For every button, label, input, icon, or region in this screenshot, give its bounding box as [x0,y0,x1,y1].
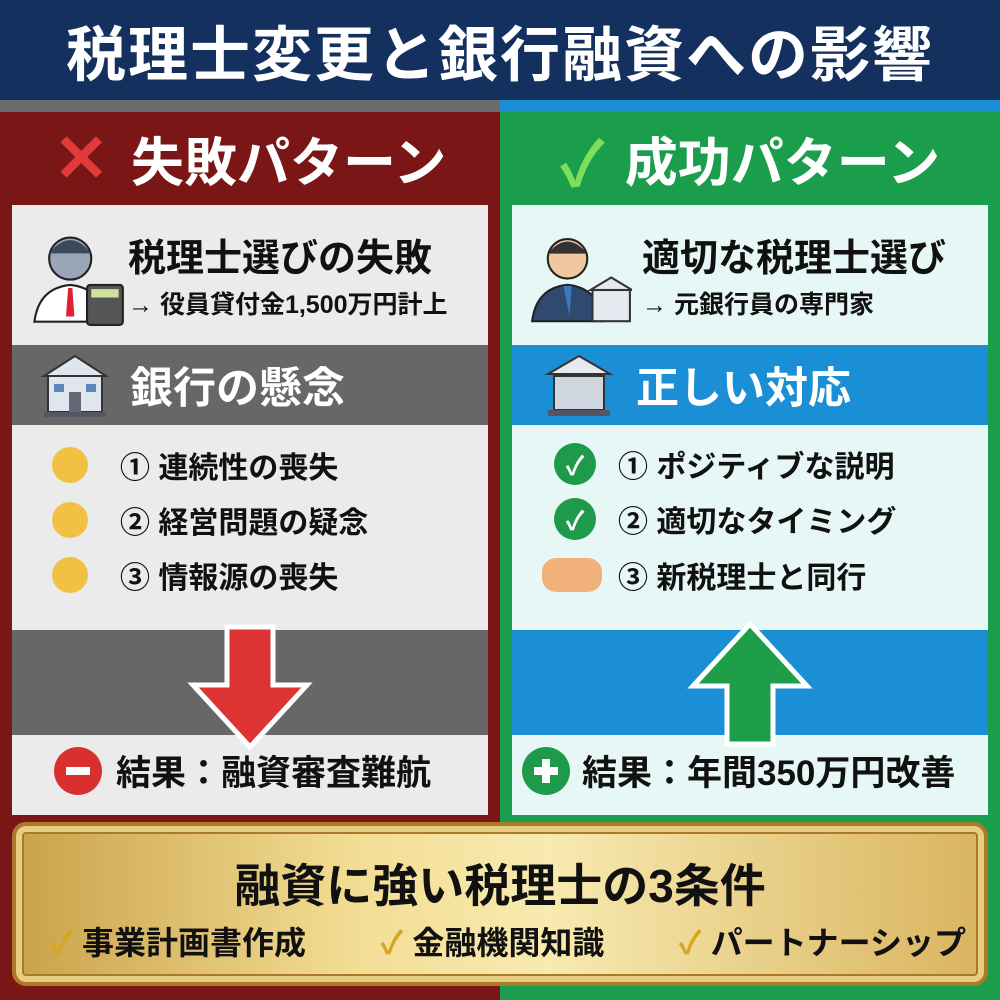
list: conditions: ✓ パートナーシップ [679,925,966,961]
heading: conditions: 融資に強い税理士の3条件 [234,860,766,912]
result: failure [54,747,431,795]
band: bank concern [12,345,488,425]
item 1 [52,447,338,485]
title bar [0,0,1000,100]
arrow: up [687,620,813,746]
text: failure subtitle: 税理士選びの失敗 [128,238,432,280]
item 2 [554,498,896,540]
title bar: 税理士変更と銀行融資への影響 [66,22,934,88]
panel: success pattern [500,112,1000,1000]
list: conditions: ✓ 金融機関知識 [380,925,604,961]
heading: failure: 失敗パターン [131,134,446,192]
list: concerns [52,447,368,595]
list: conditions: ✓ 事業計画書作成 [50,925,306,961]
list: conditions [50,925,966,961]
band: correct response: 正しい対応 [636,365,851,413]
item 2: ② 適切なタイミング [618,506,896,539]
text: failure detail: → 役員貸付金1,500万円計上 [128,291,448,319]
list: responses [542,443,896,595]
icon: bank [544,354,614,416]
panel: failure pattern [0,112,500,1000]
band: bank concern: 銀行の懸念 [130,365,345,413]
result: failure: 結果：融資審査難航 [116,754,431,793]
heading: success: 成功パターン [625,134,940,192]
panel: 3 conditions [12,822,988,986]
item 1: ① ポジティブな説明 [618,451,895,484]
result: success: 結果：年間350万円改善 [582,754,955,793]
band: correct response [512,345,988,425]
heading: failure [54,121,446,195]
item 1 [554,443,895,485]
text: success subtitle: 適切な税理士選び [642,238,946,280]
icon: professional [531,238,632,322]
icon: stressed person [33,236,124,326]
icon: bank [40,354,110,417]
item 3 [542,558,866,595]
heading: success: ✓ [560,130,605,200]
text: success detail: → 元銀行員の専門家 [642,291,874,319]
item 2: ② 経営問題の疑念 [120,507,368,540]
item 2 [52,502,368,540]
item 3: ③ 新税理士と同行 [618,562,866,595]
heading: failure: ✕ [54,121,109,195]
arrow: down [187,624,313,750]
item 1: ✓ [566,450,584,480]
item 2: ✓ [566,506,584,536]
item 3: ③ 情報源の喪失 [120,562,338,595]
card: success [512,205,988,815]
card: failure [12,205,488,815]
item 1: ① 連続性の喪失 [120,452,338,485]
item 3 [52,557,338,595]
